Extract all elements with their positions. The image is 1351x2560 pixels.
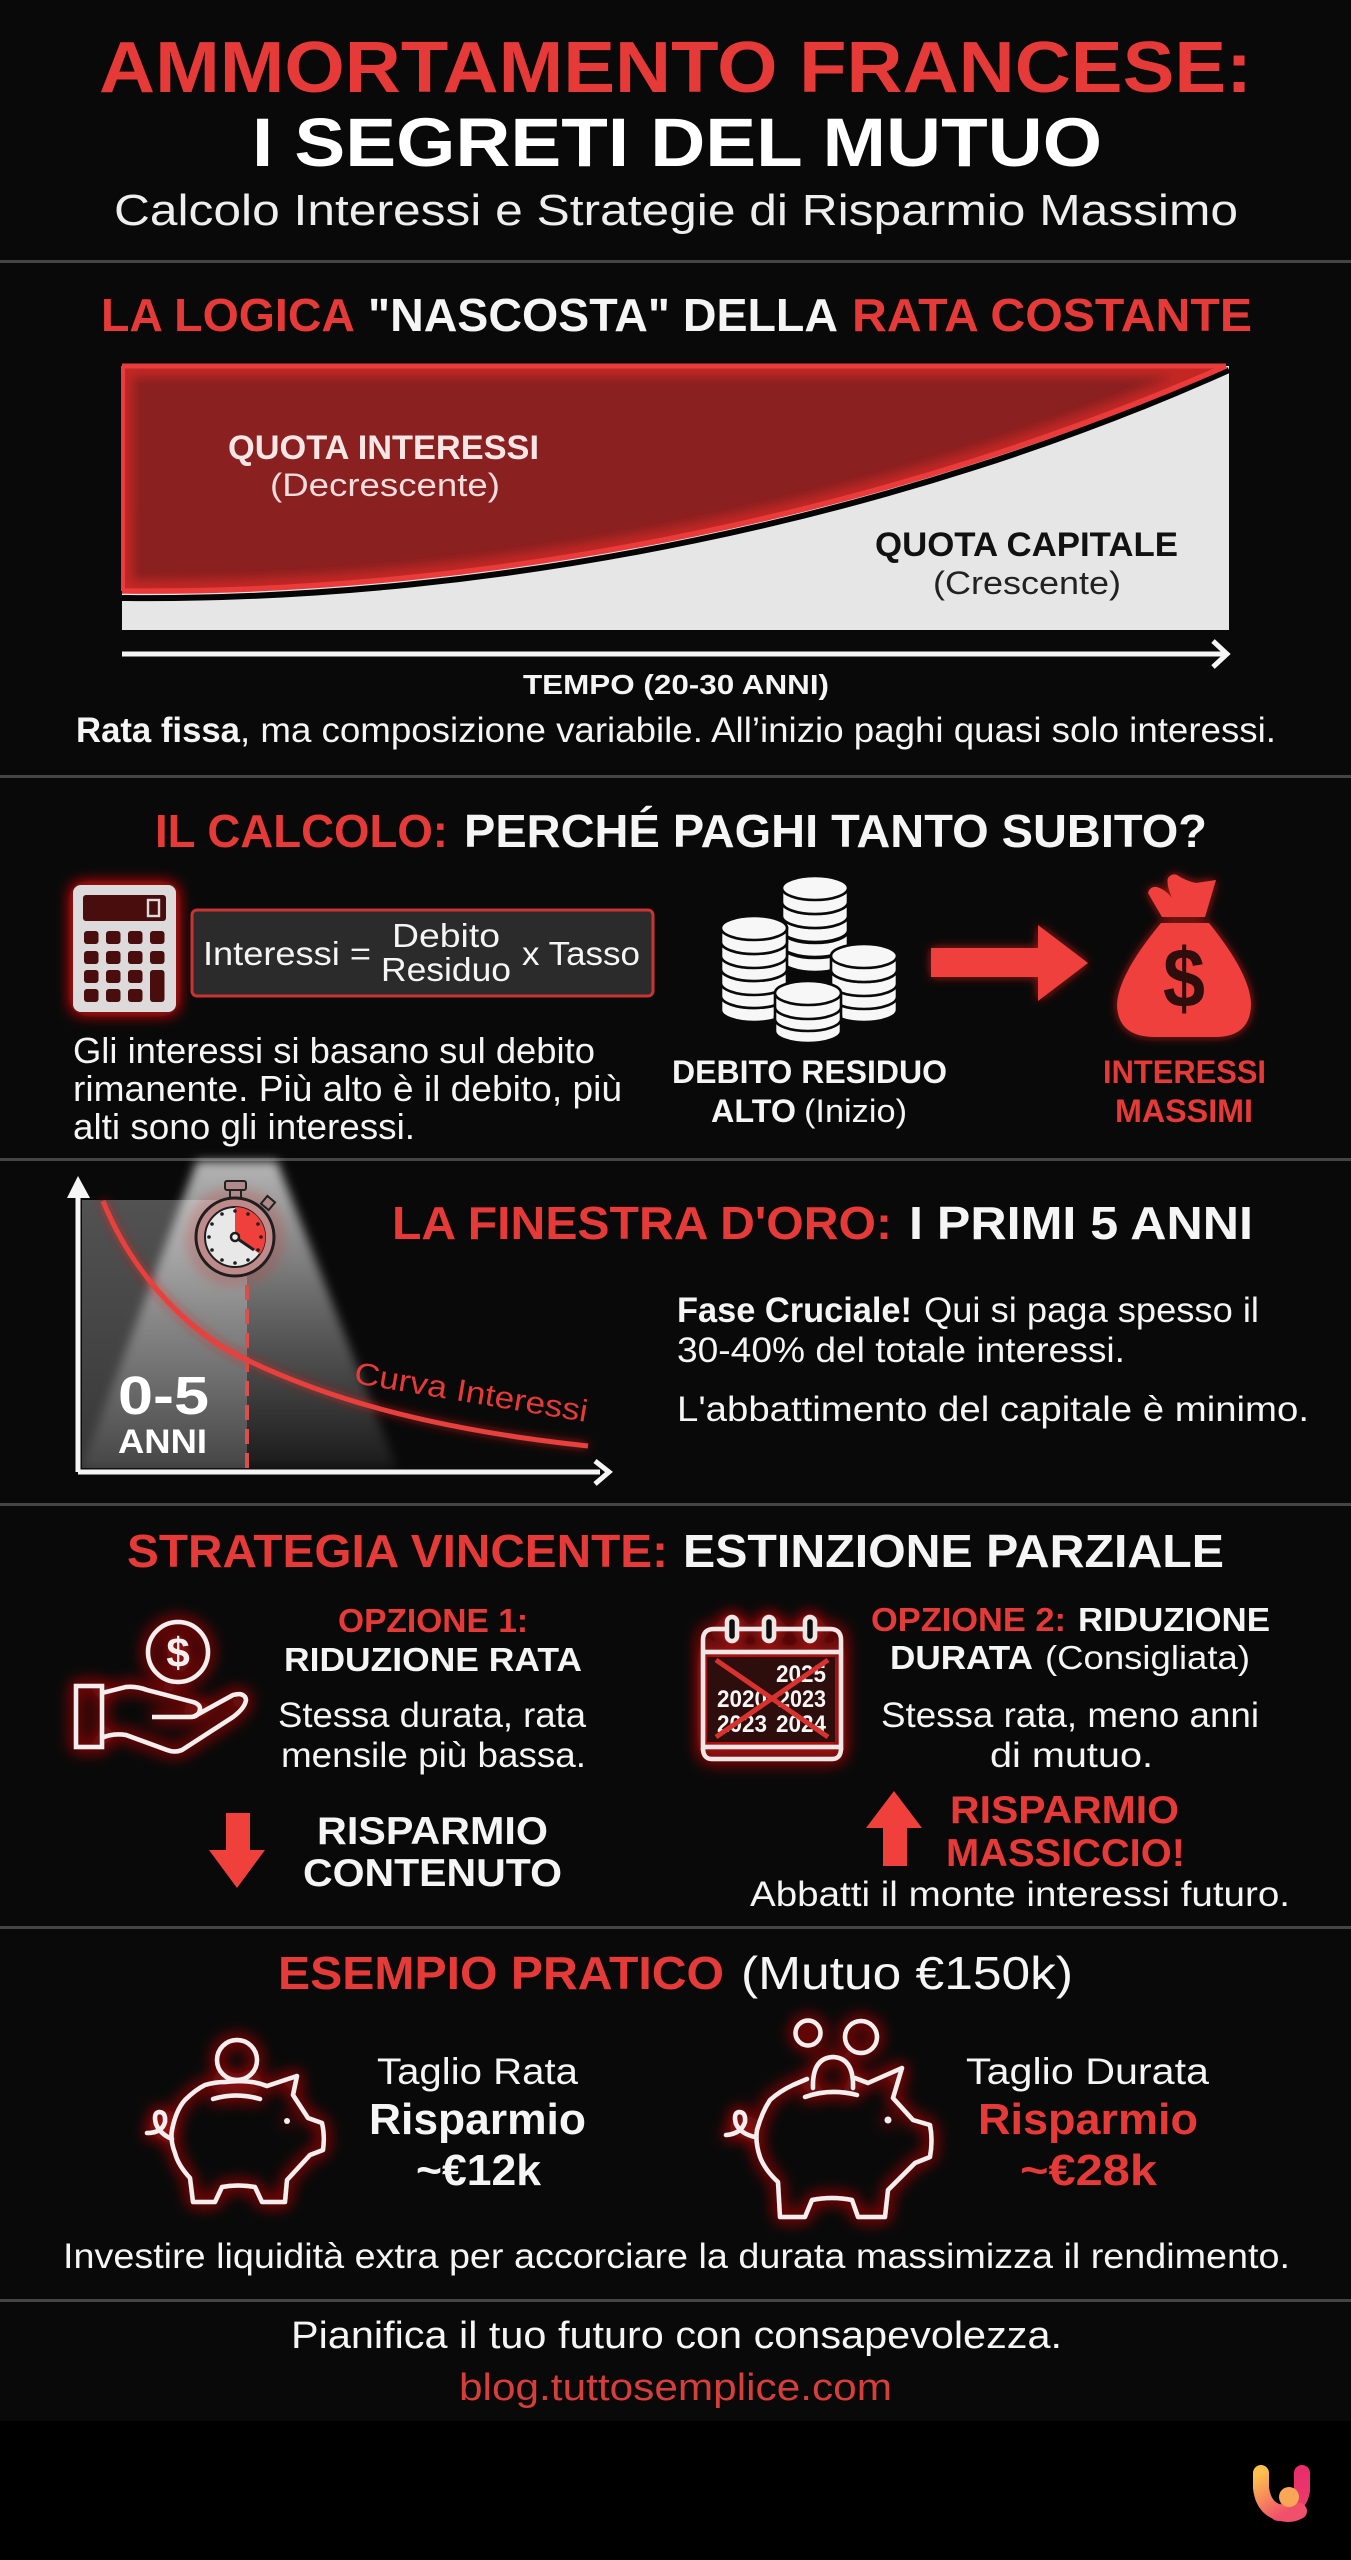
logo xyxy=(1261,2473,1302,2514)
option 2 text: OPZIONE 2: xyxy=(871,1601,1066,1638)
text: rata fissa: , ma composizione variabile. All’inizio paghi quasi solo interessi. xyxy=(240,711,1276,750)
label: risparmio contenuto: RISPARMIO xyxy=(317,1810,548,1853)
option 1 text: OPZIONE 1: xyxy=(338,1602,528,1639)
heading: esempio pratico xyxy=(278,1947,1073,1999)
axis label: tempo: TEMPO (20-30 ANNI) xyxy=(523,669,829,700)
footer: Pianifica il tuo futuro con consapevolezza. xyxy=(291,2315,1062,2357)
formula box: x Tasso xyxy=(522,935,640,972)
text: fase cruciale xyxy=(677,1291,1309,1429)
text: spiegazione interessi: Gli interessi si basano sul debito xyxy=(73,1030,595,1071)
heading: la logica della rata costante: RATA COSTANTE xyxy=(852,289,1252,341)
option 2 text: Stessa rata, meno anni xyxy=(881,1696,1259,1735)
text: taglio rata: ~€12k xyxy=(416,2146,542,2195)
text: taglio durata: Risparmio xyxy=(978,2095,1198,2144)
label: risparmio massiccio: RISPARMIO xyxy=(950,1789,1179,1832)
heading: esempio pratico: ESEMPIO PRATICO xyxy=(278,1947,724,1999)
text: spiegazione interessi xyxy=(73,1030,622,1147)
text: taglio durata xyxy=(966,2051,1209,2195)
label: quota interessi: (Decrescente) xyxy=(270,467,500,503)
icon: money bag xyxy=(1117,874,1251,1037)
text: abbatti il monte interessi: Abbatti il monte interessi futuro. xyxy=(750,1875,1290,1914)
formula box: Residuo xyxy=(381,951,511,988)
chart: finestra d'oro xyxy=(67,1161,609,1484)
formula box: Debito xyxy=(392,917,500,954)
text: taglio durata: ~€28k xyxy=(1020,2146,1158,2195)
icon: coin stacks xyxy=(721,876,897,1043)
text: fase cruciale: 30-40% del totale interessi. xyxy=(677,1331,1125,1370)
title: Calcolo Interessi e Strategie di Risparmio Massimo xyxy=(114,186,1238,235)
label: quota capitale xyxy=(875,526,1178,601)
label: risparmio contenuto: CONTENUTO xyxy=(303,1852,562,1895)
label: quota interessi: QUOTA INTERESSI xyxy=(228,429,539,467)
icon: calendar xyxy=(703,1617,841,1759)
label: 0-5 anni: 0-5 xyxy=(118,1366,209,1426)
heading: la finestra d'oro: LA FINESTRA D'ORO: xyxy=(392,1197,892,1249)
icon: calendar: 2023 xyxy=(778,1686,826,1713)
icon: hand with coin xyxy=(76,1622,246,1752)
icon: calculator xyxy=(73,885,176,1012)
icon: money bag: $ xyxy=(1163,931,1205,1025)
label: debito residuo alto: (Inizio) xyxy=(804,1093,907,1129)
option 2 text: di mutuo. xyxy=(990,1736,1153,1775)
footer: blog.tuttosemplice.com xyxy=(459,2367,892,2409)
icon: hand with coin: $ xyxy=(166,1629,190,1676)
label: debito residuo alto xyxy=(672,1054,947,1129)
heading: esempio pratico: (Mutuo €150k) xyxy=(741,1947,1073,1999)
icon: calendar: 2025 xyxy=(776,1661,826,1688)
arrow: down xyxy=(209,1813,265,1888)
formula box xyxy=(192,910,653,996)
heading: il calcolo: IL CALCOLO: xyxy=(155,805,448,857)
title: I SEGRETI DEL MUTUO xyxy=(252,104,1102,181)
icon: stopwatch xyxy=(185,1181,285,1287)
option 2 text: DURATA xyxy=(890,1639,1033,1676)
heading: il calcolo xyxy=(155,805,1207,857)
label: quota interessi xyxy=(228,429,539,503)
heading: strategia vincente xyxy=(127,1525,1224,1577)
title xyxy=(99,28,1252,235)
icon: calendar: 2023 xyxy=(717,1711,767,1738)
option 1 text: RIDUZIONE RATA xyxy=(284,1641,582,1678)
formula box: Interessi = xyxy=(203,935,371,972)
arrow: debito to interessi xyxy=(931,925,1088,1001)
label: debito residuo alto: DEBITO RESIDUO xyxy=(672,1054,947,1090)
label: curva interessi: Curva Interessi xyxy=(352,1355,590,1429)
heading: strategia vincente: ESTINZIONE PARZIALE xyxy=(683,1525,1224,1577)
text: rata fissa: Rata fissa xyxy=(76,711,241,750)
label: risparmio massiccio xyxy=(946,1789,1185,1875)
option 2 text: (Consigliata) xyxy=(1045,1639,1250,1676)
icon: calendar: 2020 xyxy=(717,1686,767,1713)
text: fase cruciale: Qui si paga spesso il xyxy=(924,1291,1259,1330)
label: quota capitale: (Crescente) xyxy=(933,565,1121,601)
option 2 text xyxy=(871,1601,1270,1775)
heading: la finestra d'oro: I PRIMI 5 ANNI xyxy=(909,1197,1253,1249)
option 1 text xyxy=(278,1602,587,1775)
label: 0-5 anni: ANNI xyxy=(118,1423,207,1461)
chart: rata composition area xyxy=(122,366,1229,630)
footer xyxy=(291,2315,1062,2409)
option 2 text: RIDUZIONE xyxy=(1078,1601,1270,1638)
heading: strategia vincente: STRATEGIA VINCENTE: xyxy=(127,1525,668,1577)
text: spiegazione interessi: rimanente. Più alto è il debito, più xyxy=(73,1068,622,1109)
option 1 text: Stessa durata, rata xyxy=(278,1696,587,1735)
text: taglio rata: Risparmio xyxy=(369,2095,586,2144)
text: investire liquidità: Investire liquidità extra per accorciare la durata massimizza il rendimento. xyxy=(63,2237,1290,2276)
option 1 text: mensile più bassa. xyxy=(281,1736,586,1775)
arrow: time axis xyxy=(122,641,1227,667)
heading: la finestra d'oro xyxy=(392,1197,1253,1249)
label: quota capitale: QUOTA CAPITALE xyxy=(875,526,1178,564)
icon: calendar: 2024 xyxy=(776,1711,827,1738)
text: taglio rata: Taglio Rata xyxy=(377,2051,578,2092)
icon: piggy bank one xyxy=(147,2040,324,2202)
text: fase cruciale: Fase Cruciale! xyxy=(677,1291,912,1330)
heading: la logica della rata costante: "NASCOSTA" DELLA xyxy=(368,289,838,341)
label: risparmio massiccio: MASSICCIO! xyxy=(946,1832,1185,1875)
text: spiegazione interessi: alti sono gli interessi. xyxy=(73,1106,415,1147)
text: taglio durata: Taglio Durata xyxy=(966,2051,1209,2092)
heading: la logica della rata costante: LA LOGICA xyxy=(101,289,355,341)
icon: piggy bank two xyxy=(726,2020,932,2217)
text: fase cruciale: L'abbattimento del capitale è minimo. xyxy=(677,1390,1309,1429)
label: interessi massimi xyxy=(1103,1054,1266,1129)
label: 0-5 anni xyxy=(118,1366,209,1461)
label: risparmio contenuto xyxy=(303,1810,562,1895)
arrow: up xyxy=(866,1791,922,1866)
heading: la logica della rata costante xyxy=(101,289,1252,341)
heading: il calcolo: PERCHÉ PAGHI TANTO SUBITO? xyxy=(464,805,1207,857)
label: interessi massimi: MASSIMI xyxy=(1115,1093,1253,1129)
title: AMMORTAMENTO FRANCESE: xyxy=(99,28,1252,108)
label: debito residuo alto: ALTO xyxy=(711,1093,796,1129)
text: taglio rata xyxy=(369,2051,586,2195)
label: interessi massimi: INTERESSI xyxy=(1103,1054,1266,1090)
